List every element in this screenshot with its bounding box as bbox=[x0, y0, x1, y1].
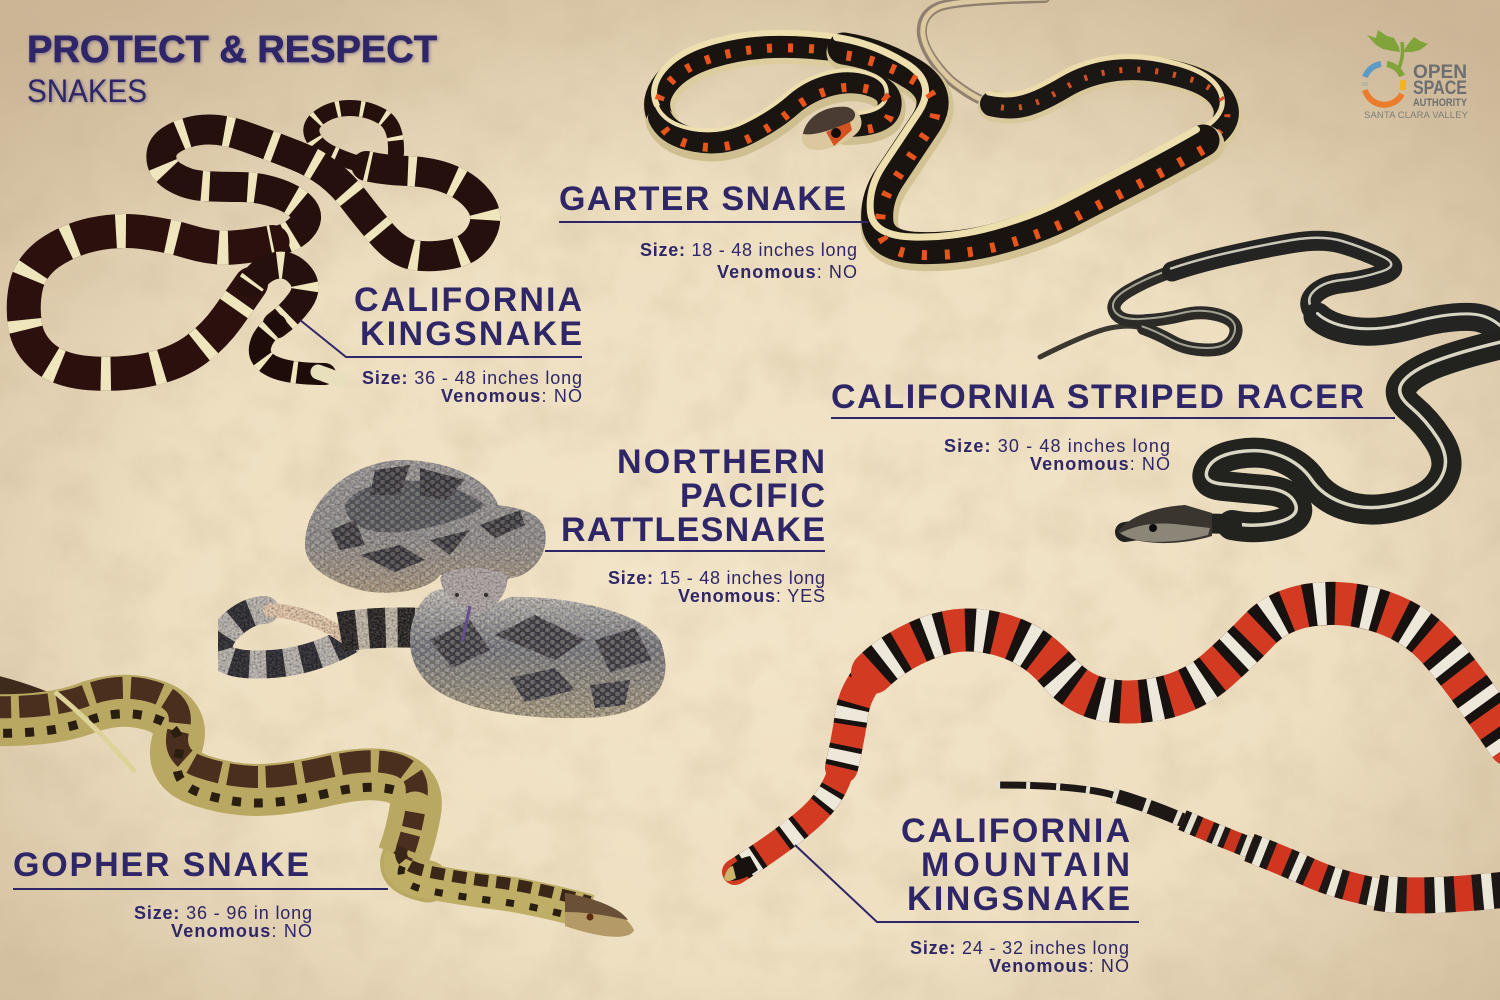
icon: Open Space Authority logo bbox=[1364, 30, 1469, 121]
label: California kingsnake: Venomous: NO bbox=[441, 386, 582, 406]
label: California kingsnake bbox=[300, 281, 582, 406]
snake: California mountain kingsnake bbox=[724, 603, 1500, 895]
label: garter snake bbox=[559, 180, 868, 282]
icon: Open Space Authority logo: SANTA CLARA VALLEY bbox=[1364, 110, 1469, 121]
label: California kingsnake: KINGSNAKE bbox=[360, 315, 582, 353]
label: gopher snake: GOPHER SNAKE bbox=[13, 846, 309, 884]
label: California mountain kingsnake bbox=[795, 812, 1139, 976]
label: California mountain kingsnake: CALIFORNIA bbox=[901, 812, 1130, 850]
label: California mountain kingsnake: Venomous: NO bbox=[989, 956, 1129, 976]
snake: California striped racer bbox=[1040, 238, 1500, 543]
label: Northern Pacific rattlesnake: RATTLESNAKE bbox=[561, 511, 825, 549]
label: California mountain kingsnake: MOUNTAIN bbox=[921, 846, 1130, 884]
label: garter snake: GARTER SNAKE bbox=[559, 180, 846, 218]
label: California mountain kingsnake: KINGSNAKE bbox=[907, 880, 1130, 918]
snake head: gopher bbox=[565, 893, 634, 937]
label: California mountain kingsnake: Size: 24 - 32 inches long bbox=[910, 938, 1129, 958]
label: Northern Pacific rattlesnake: PACIFIC bbox=[680, 477, 825, 515]
label: gopher snake: Venomous: NO bbox=[171, 921, 312, 941]
title: PROTECT & RESPECT bbox=[27, 29, 437, 71]
label: California striped racer: CALIFORNIA STRIPED RACER bbox=[831, 378, 1364, 416]
snake head: garter bbox=[802, 107, 862, 150]
label: garter snake: Size: 18 - 48 inches long bbox=[640, 240, 857, 260]
snake head: racer bbox=[1118, 505, 1212, 543]
label: Northern Pacific rattlesnake: Size: 15 - 48 inches long bbox=[608, 568, 825, 588]
label: California striped racer bbox=[831, 378, 1395, 474]
snake: gopher snake bbox=[0, 685, 634, 937]
label: garter snake: Venomous: NO bbox=[717, 262, 857, 282]
label: gopher snake bbox=[13, 846, 388, 941]
snake: garter snake bbox=[654, 0, 1227, 255]
icon: Open Space Authority logo: SPACE bbox=[1413, 78, 1467, 99]
label: Northern Pacific rattlesnake: NORTHERN bbox=[617, 443, 825, 481]
snake head: mountain kingsnake bbox=[724, 856, 758, 881]
snake: California kingsnake bbox=[24, 108, 485, 380]
label: California kingsnake: CALIFORNIA bbox=[354, 281, 582, 319]
icon: Open Space Authority logo: OPEN bbox=[1413, 62, 1467, 83]
label: gopher snake: Size: 36 - 96 in long bbox=[134, 903, 312, 923]
label: Northern Pacific rattlesnake bbox=[545, 443, 825, 606]
snake: Northern Pacific rattlesnake bbox=[218, 460, 665, 718]
title bbox=[27, 29, 437, 109]
label: California striped racer: Size: 30 - 48 inches long bbox=[944, 436, 1170, 456]
label: California kingsnake: Size: 36 - 48 inches long bbox=[362, 368, 582, 388]
label: California striped racer: Venomous: NO bbox=[1030, 454, 1170, 474]
title: SNAKES bbox=[27, 73, 147, 109]
label: Northern Pacific rattlesnake: Venomous: YES bbox=[678, 586, 825, 606]
icon: Open Space Authority logo: AUTHORITY bbox=[1413, 97, 1468, 109]
